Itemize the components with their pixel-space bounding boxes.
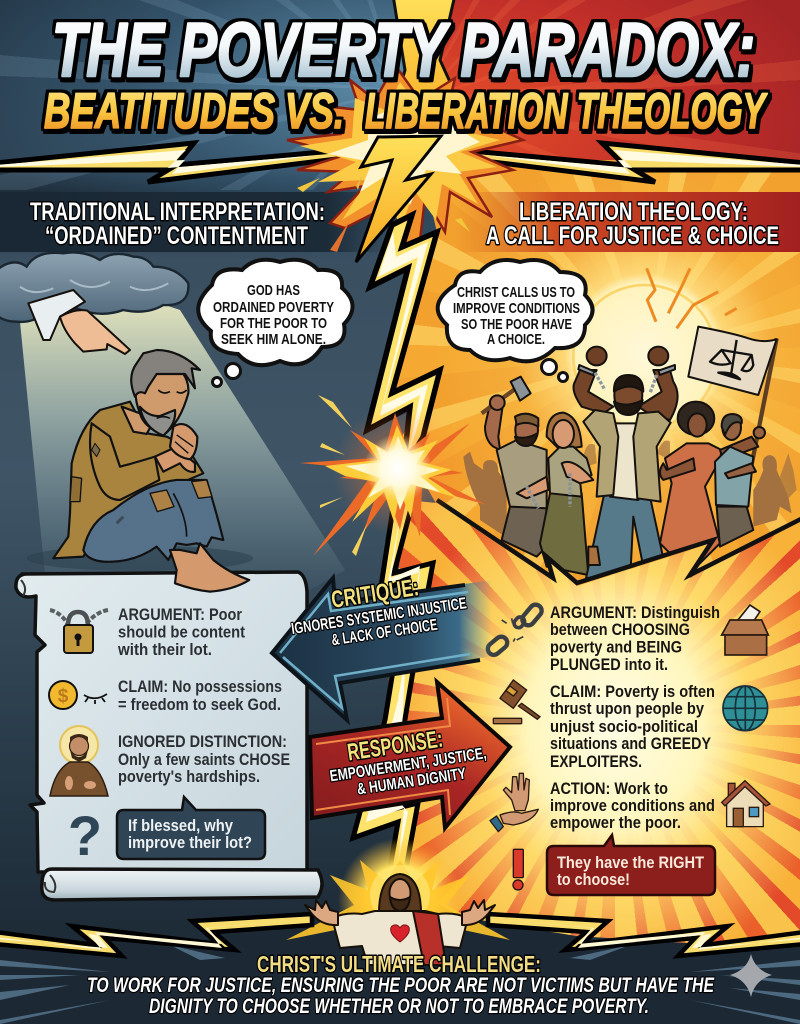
- central vertical lightning bolt, lower: [353, 495, 433, 880]
- claim text right: EXPLOITERS.: [550, 752, 642, 771]
- claim text right: situations and GREEDY: [550, 734, 712, 753]
- subtitle: BEATITUDES VS.: [44, 83, 344, 139]
- thought bubble left: GOD HAS: [247, 282, 300, 299]
- arrow: critique: [272, 567, 492, 720]
- speech bubble: right to choose: [547, 835, 715, 895]
- argument text right: ARGUMENT: Distinguish: [550, 603, 720, 622]
- argument text right: between CHOOSING: [550, 620, 690, 639]
- speech bubble: question: If blessed, why: [128, 816, 233, 835]
- icon: question mark: ?: [68, 804, 102, 867]
- argument text: should be content: [118, 622, 245, 642]
- head: [136, 363, 188, 435]
- woman with chain: [547, 413, 582, 450]
- speech bubble: question: improve their lot?: [128, 833, 252, 852]
- left section heading: TRADITIONAL INTERPRETATION:: [30, 198, 325, 226]
- action text right: empower the poor.: [550, 813, 681, 832]
- robe: [332, 911, 468, 965]
- lightning bolt: title emblem: [356, 136, 441, 262]
- action text right: improve conditions and: [550, 796, 715, 815]
- sparks near top burst: [297, 176, 470, 252]
- ignored distinction text: [118, 732, 290, 786]
- claim text right: CLAIM: Poverty is often: [550, 682, 715, 701]
- lead man jeans: [586, 495, 663, 578]
- sash: [413, 911, 446, 965]
- sparkle watermark: [730, 954, 772, 997]
- argument text right: poverty and BEING: [550, 638, 682, 656]
- scales of justice on flag: [710, 340, 753, 379]
- storm cloud: [0, 252, 188, 322]
- subtitle: [44, 83, 768, 139]
- left section heading: “ORDAINED” CONTENTMENT: [45, 222, 308, 250]
- background: red top right: [442, 0, 800, 160]
- bottom band rays: [0, 945, 800, 1024]
- speech bubble: right to choose: to choose!: [557, 870, 630, 889]
- icon: gavel: [493, 680, 540, 724]
- claim text right: unjust socio-political: [550, 717, 698, 736]
- horizontal bolt: bottom right: [488, 914, 800, 956]
- thought bubble right: [438, 260, 592, 382]
- icon: coin and closed eye: $: [58, 686, 69, 707]
- icon: hands: [490, 773, 538, 832]
- claim text: CLAIM: No possessions: [118, 677, 282, 696]
- heart: [391, 925, 409, 942]
- background: sunburst mid right: [396, 160, 800, 586]
- hammer man: [485, 398, 503, 450]
- lead man shirt and vest: [610, 423, 638, 500]
- hair: [379, 874, 421, 918]
- feet: [170, 543, 249, 592]
- hands: [305, 900, 338, 925]
- light beam: [20, 300, 345, 590]
- thought bubble left: SEEK HIM ALONE.: [221, 331, 326, 348]
- bottom roll: [42, 869, 322, 900]
- thought bubble right: SO THE POOR HAVE: [461, 316, 572, 333]
- footer text: [87, 974, 715, 1018]
- sun glow ring and cracks: [573, 268, 737, 428]
- argument text right: PLUNGED into it.: [550, 655, 668, 674]
- arrow: response: & HUMAN DIGNITY: [356, 765, 468, 799]
- ignored distinction text: Only a few saints CHOSE: [118, 750, 290, 769]
- left section heading: [30, 198, 325, 250]
- arrow: response: RESPONSE:: [346, 726, 445, 766]
- action text right: [550, 779, 715, 832]
- arrow: response: EMPOWERMENT, JUSTICE,: [329, 745, 488, 785]
- starburst: top center: [287, 65, 523, 246]
- section header band: right: [455, 192, 800, 252]
- horizontal bolt: top left: [0, 143, 345, 182]
- right section heading: [486, 198, 779, 250]
- right column content: [485, 602, 770, 895]
- lightning bolt: top center: [385, 0, 455, 140]
- action text right: ACTION: Work to: [550, 779, 668, 798]
- thought bubble left: [198, 260, 353, 386]
- shirt: [53, 402, 203, 558]
- thought bubble right: CHRIST CALLS US TO: [457, 284, 575, 301]
- arrow: critique: & LACK OF CHOICE: [330, 617, 439, 649]
- bottom dark band: [0, 905, 800, 1024]
- group of protesters: [463, 327, 797, 578]
- icon: broken chain: [485, 602, 544, 657]
- neck: [122, 407, 151, 434]
- legs: [83, 480, 223, 562]
- background: radial burst lower right: [388, 502, 800, 943]
- flag bearer: [717, 507, 753, 547]
- icon: globe: [723, 686, 768, 731]
- claim text: = freedom to seek God.: [118, 695, 281, 714]
- horizontal bolt: top right: [460, 143, 800, 182]
- radial burst edge over crowd: [437, 500, 800, 583]
- central vertical lightning bolt, upper: [367, 215, 440, 470]
- scroll panel: traditional arguments: [16, 572, 322, 900]
- pointing hand from cloud: [28, 290, 130, 354]
- ignored distinction text: IGNORED DISTINCTION:: [118, 732, 287, 751]
- argument text: [117, 605, 245, 659]
- icon: house: [722, 781, 770, 827]
- icon: padlock with chains: [50, 610, 108, 653]
- icon: saint with halo: [50, 726, 108, 796]
- figure of Christ: [305, 865, 495, 965]
- background silhouettes: [463, 440, 797, 540]
- face: [390, 879, 410, 907]
- speech bubble: question: [117, 797, 265, 859]
- afro woman: [678, 402, 714, 435]
- lead man fists and broken chains: [587, 347, 607, 365]
- lead man arms: [573, 370, 613, 413]
- center explosion: [300, 395, 487, 556]
- thought bubble left: ORDAINED POVERTY: [213, 299, 334, 316]
- icon: exclamation mark: [513, 849, 523, 890]
- arrow: critique: IGNORES SYSTEMIC INJUSTICE: [290, 595, 468, 638]
- arrow: response: [310, 682, 510, 828]
- background: left rays: [0, 0, 800, 190]
- horizontal bolt: bottom left: [0, 914, 312, 956]
- flag: [751, 338, 779, 466]
- thought bubble right: A CHOICE.: [487, 331, 545, 348]
- icon: ballot box: [722, 605, 768, 655]
- claim text right: thrust upon people by: [550, 699, 704, 718]
- halo and glow behind Christ: [286, 838, 510, 962]
- claim text: [118, 677, 282, 714]
- footer heading: CHRIST'S ULTIMATE CHALLENGE:: [257, 951, 541, 977]
- poor man seated in prayer: [27, 350, 253, 592]
- speech bubble: right to choose: They have the RIGHT: [557, 853, 705, 872]
- ignored distinction text: poverty's hardships.: [118, 767, 260, 786]
- arrow: critique: CRITIQUE:: [330, 574, 421, 614]
- lead man head: [613, 388, 644, 404]
- argument text right: [550, 603, 720, 674]
- argument text: with their lot.: [117, 640, 212, 659]
- thought bubble left: FOR THE POOR TO: [220, 315, 327, 332]
- sleeve and arm: [90, 423, 159, 500]
- section header band: left: [0, 192, 385, 252]
- thought bubble right: IMPROVE CONDITIONS: [453, 300, 580, 317]
- argument text: ARGUMENT: Poor: [118, 605, 242, 624]
- icon: coin and closed eye: [49, 681, 107, 709]
- claim text right: [550, 682, 715, 771]
